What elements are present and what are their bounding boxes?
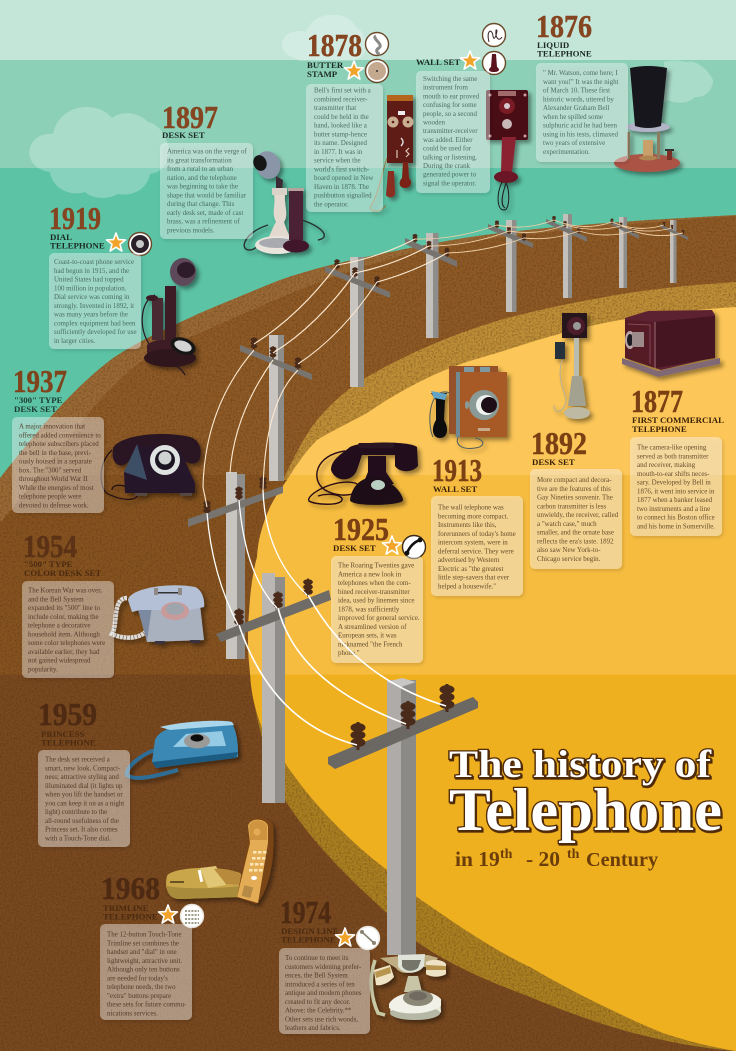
subtitle: DESIGN LINE [281, 926, 338, 936]
year: 1968 [101, 870, 160, 906]
icon: handset [402, 536, 426, 558]
panel text: its great transformation [167, 156, 232, 164]
panel text: created to fit any decor. [285, 998, 351, 1006]
year: 1959 [38, 696, 97, 732]
panel text: Electric as "the greatest [438, 565, 504, 573]
subtitle: century: Century [586, 849, 658, 871]
panel text: its name. Designed [314, 139, 368, 147]
panel text: two years of extensive [543, 139, 605, 147]
panel text: telephone subscribers placed [19, 440, 99, 448]
subtitle: century: th [567, 847, 580, 862]
panel text: sufficiently developed for use [54, 328, 137, 336]
panel text: and the Bell System [28, 595, 84, 603]
subtitle: DIAL [50, 232, 72, 242]
phone: 1974 design line telephone [371, 954, 446, 1020]
panel text: sulphuric acid he had been [543, 122, 618, 130]
panel text: wooden [423, 118, 445, 126]
subtitle: DESK SET [162, 130, 205, 140]
panel text: in 1877. It was in [314, 148, 363, 156]
insulators on poles [203, 216, 684, 750]
subtitle: DESK SET [14, 404, 57, 414]
panel text: mouth to ear proved [423, 92, 480, 100]
panel text: brass, was a refinement of [167, 218, 240, 226]
panel text: telephones when the com- [338, 579, 411, 587]
panel text: bined receiver-transmitter [338, 588, 410, 596]
title line 2: Telephone [449, 777, 722, 843]
telephone wires [203, 220, 683, 745]
panel text: little step-savers that ever [438, 574, 510, 582]
panel: 1913 wall set [431, 452, 523, 596]
panel text: customers widening prefer- [285, 963, 362, 971]
panel box [416, 71, 490, 193]
panel text: could be held in the [314, 113, 369, 121]
panel text: improved for general service. [338, 614, 420, 622]
panel text: America was on the verge of [167, 148, 247, 156]
star [106, 233, 126, 251]
phone: 1892 desk set [554, 313, 590, 419]
panel: 1878 butter stamp [306, 27, 388, 212]
icon: stamp top [366, 60, 388, 82]
panel text: was many years before the [54, 310, 128, 318]
subtitle: TELEPHONE [41, 738, 96, 748]
panel text: expanded its "500" line to [28, 604, 100, 612]
panel text: when you lift the handset or [45, 790, 123, 798]
panel text: The 12-button Touch-Tone [107, 930, 181, 938]
panel text: you can keep it on as a night [45, 799, 124, 807]
panel text: when he spilled some [543, 113, 603, 121]
panel text: the operator. [314, 200, 349, 208]
panel text: intercom system, were in [438, 538, 508, 546]
panel text: experimentation. [543, 148, 590, 156]
panel text: world's first switch- [314, 165, 370, 173]
panel box [22, 581, 114, 678]
panel text: light) contribute to the [45, 808, 107, 816]
panel text: sary. Developed by Bell in [637, 478, 711, 486]
subtitle: "500" TYPE [24, 559, 72, 569]
panel text: United States had topped [54, 276, 124, 284]
icon: earpiece [366, 32, 388, 56]
star [460, 51, 480, 69]
panel: wall set [416, 24, 506, 193]
panel text: antique and modern phones [285, 989, 362, 997]
icon: receiver [482, 52, 506, 74]
panel text: complex equipment had been [54, 319, 136, 327]
panel text: tive are the features of this [537, 485, 611, 493]
panel text: Alexander Graham Bell [543, 104, 609, 112]
panel text: box. The "300" served [19, 466, 82, 474]
star [382, 536, 402, 554]
icon: handset [356, 926, 380, 950]
panel text: with a Touch-Tone dial. [45, 834, 111, 842]
panel text: telephone a decorative [28, 622, 90, 630]
panel text: talking or listening. [423, 153, 477, 161]
panel text: lightweight, attractive unit. [107, 957, 182, 965]
panel text: The Roaring Twenties gave [338, 562, 414, 570]
panel: 1937 300 type desk set [12, 363, 104, 513]
subtitle: WALL SET [433, 484, 477, 494]
panel box [530, 469, 622, 569]
panel text: nicknamed "the French [338, 640, 403, 648]
phone: wall set [486, 90, 528, 210]
panel text: confusing for some [423, 101, 477, 109]
panel text: "extra" buttons prepare [107, 992, 171, 1000]
panel text: pushbutton signalled [314, 192, 372, 200]
panel box [38, 750, 130, 847]
subtitle: century: in 19 [455, 847, 500, 871]
phone: 1968 trimline telephone [166, 818, 274, 904]
phone: 1925 french desk set [309, 442, 418, 505]
subtitle: TELEPHONE [537, 49, 592, 59]
panel: 1919 dial telephone [49, 200, 152, 349]
panel text: instrument from [423, 84, 468, 92]
panel text: previous models. [167, 226, 215, 234]
subtitle: WALL SET [416, 57, 460, 67]
panel text: advertised by Western [438, 556, 500, 564]
panel text: a "watch case," much [537, 520, 597, 528]
clouds [29, 15, 713, 198]
panel text: household item. Although [28, 630, 100, 638]
panel text: shape that would be familiar [167, 191, 247, 199]
year: 1954 [23, 528, 77, 564]
panel text: using in his tests, climaxed [543, 130, 618, 138]
panel text: helped a housewife." [438, 582, 496, 590]
year: 1877 [631, 383, 683, 419]
panel text: The Korean War was over, [28, 586, 102, 594]
phone: 1959 princess telephone [127, 721, 238, 778]
star [344, 61, 364, 79]
panel text: butter stamp-hence [314, 130, 367, 138]
panel text: ences, the Bell System [285, 972, 348, 980]
panel text: combined receiver- [314, 95, 368, 103]
panel text: in larger cities. [54, 337, 96, 345]
subtitle: TELEPHONE [281, 935, 336, 945]
panel text: Bell's first set with a [314, 86, 371, 94]
panel text: idea, used by linemen since [338, 596, 414, 604]
panel: 1877 first commercial telephone [630, 383, 724, 536]
panel text: during that change. This [167, 200, 235, 208]
panel: 1974 design line telephone [279, 894, 380, 1034]
panel text: to connect his Boston office [637, 514, 715, 522]
panel text: are needed for today's [107, 974, 168, 982]
panel text: throughout World War II [19, 475, 88, 483]
panel text: carbon transmitter is less [537, 502, 606, 510]
panel: 1954 500 type color desk set [22, 528, 114, 678]
panel text: served as both transmitter [637, 452, 709, 460]
sky background [0, 0, 736, 588]
panel text: also saw New York-to- [537, 546, 601, 554]
panel text: Trimline set combines the [107, 939, 179, 947]
hill: golden textured ring [252, 282, 736, 1051]
panel text: handset and "dial" in one [107, 948, 177, 956]
panel box [12, 417, 104, 513]
year: 1892 [531, 425, 587, 461]
panel text: devoted to defense work. [19, 501, 89, 509]
title line 1: The history of [449, 743, 712, 786]
panel text: some color telephones were [28, 639, 105, 647]
phone: 1919 dial telephone [142, 258, 198, 375]
panel text: Haven in 1878. The [314, 183, 369, 191]
panel text: service when the [314, 156, 361, 164]
panel text: While the energies of most [19, 484, 94, 492]
panel text: transmitter that [314, 104, 356, 112]
panel text: Instruments like this, [438, 521, 497, 529]
panel text: introduced a series of ten [285, 980, 355, 988]
panel text: European sets, it was [338, 632, 397, 640]
phone: 1877 first commercial telephone [622, 310, 720, 377]
panel text: transmitter-receiver [423, 127, 478, 135]
panel text: include color, making the [28, 613, 99, 621]
panel box [431, 496, 523, 596]
telephone poles receding into the distance [188, 214, 688, 955]
icon: rotary dial [128, 232, 152, 256]
panel box [100, 924, 192, 1020]
panel text: " Mr. Watson, come here; I [543, 69, 618, 77]
panel text: The wall telephone was [438, 504, 504, 512]
phone: 1954 500 type color desk set [112, 585, 204, 644]
panel text: all-round usefulness of the [45, 817, 119, 825]
panel text: Although only ten buttons [107, 966, 180, 974]
subtitle: TELEPHONE [103, 912, 158, 922]
panel box [630, 437, 722, 536]
panel text: could be used for [423, 145, 472, 153]
subtitle: DESK SET [333, 543, 376, 553]
subtitle: DESK SET [532, 457, 575, 467]
panel text: from a rural to an urban [167, 165, 234, 173]
year: 1925 [333, 511, 389, 547]
year: 1974 [280, 894, 331, 930]
subtitle: TRIMLINE [103, 903, 148, 913]
panel text: people, so a second [423, 110, 477, 118]
panel text: was added. Either [423, 136, 473, 144]
panel text: and his home in Somerville. [637, 522, 715, 530]
panel text: offered added convenience to [19, 431, 101, 439]
subtitle: STAMP [307, 69, 338, 79]
year: 1937 [13, 363, 67, 399]
panel text: want you!" It was the night [543, 78, 619, 86]
panel text: of March 10. These first [543, 86, 610, 94]
panel: 1968 trimline telephone [100, 870, 204, 1020]
panel text: smaller, and the ornate base [537, 528, 614, 536]
panel text: ously housed in a separate [19, 458, 92, 466]
panel text: America a new look in [338, 570, 402, 578]
subtitle: BUTTER [307, 60, 343, 70]
panel text: mouth-to-ear shifts neces- [637, 470, 710, 478]
panel text: board opened in New [314, 174, 374, 182]
year: 1876 [536, 8, 592, 44]
panel text: deferral service. They were [438, 547, 514, 555]
panel text: Coast-to-coast phone service [54, 258, 134, 266]
panel box [306, 84, 383, 212]
panel text: reflects the era's taste. 1892 [537, 537, 614, 545]
hill: brown ground [0, 215, 736, 1051]
panel text: The camera-like opening [637, 444, 706, 452]
panel text: During the crank [423, 162, 471, 170]
panel text: early desk set, made of cast [167, 209, 243, 217]
star [158, 905, 178, 923]
panel text: phone." [338, 649, 360, 657]
panel text: forerunners of today's home [438, 530, 516, 538]
panel text: telephone people were [19, 492, 81, 500]
panel text: the bell in the base, previ- [19, 449, 92, 457]
panel text: and receiver, making [637, 461, 696, 469]
panel text: had begun in 1915, and the [54, 267, 129, 275]
panel text: strongly. Invented in 1892, it [54, 302, 134, 310]
hill: yellow field [248, 307, 736, 1051]
title [449, 743, 722, 871]
year: 1919 [49, 200, 101, 236]
subtitle: LIQUID [537, 40, 569, 50]
panel text: telephone needs, the two [107, 983, 176, 991]
panel text: Princess set. It also comes [45, 826, 118, 834]
panel text: Other sets use rich woods, [285, 1015, 358, 1023]
panel text: 1877 when a banker leased [637, 496, 713, 504]
subtitle: century: th [500, 847, 513, 862]
panel text: historic words, uttered by [543, 95, 614, 103]
panel text: More compact and decora- [537, 476, 612, 484]
subtitle: TELEPHONE [50, 241, 105, 251]
panel text: these sets for future commu- [107, 1000, 187, 1008]
panel box [536, 63, 628, 162]
star [336, 928, 354, 946]
panel text: signal the operator. [423, 179, 476, 187]
panel text: Dial service was coming in [54, 293, 130, 301]
panel: 1892 desk set [530, 425, 622, 569]
panel text: ness; attractive styling and [45, 773, 119, 781]
panel text: 1878, was sufficiently [338, 605, 400, 613]
panel text: The desk set received a [45, 756, 110, 764]
panel box [160, 143, 253, 239]
panel: 1925 desk set [331, 511, 426, 663]
panel text: becoming more compact. [438, 512, 509, 520]
panel text: Above: the Celebrity.** [285, 1006, 352, 1014]
panel text: was beginning to take the [167, 182, 238, 190]
panel box [49, 253, 141, 349]
subtitle: FIRST COMMERCIAL [632, 415, 724, 425]
year: 1913 [432, 452, 482, 488]
panel: 1897 desk set [160, 99, 253, 239]
panel text: leathers and fabrics. [285, 1024, 341, 1032]
year: 1897 [162, 99, 218, 135]
panel text: Switching the same [423, 75, 477, 83]
panel text: generated power to [423, 171, 477, 179]
panel text: nation, and the telephone [167, 174, 237, 182]
panel text: 1876, it went into service in [637, 487, 715, 495]
panel text: smart, new look. Compact- [45, 764, 121, 772]
panel: 1876 liquid telephone [536, 8, 628, 162]
phone: 1897 desk set [244, 148, 324, 254]
panel text: nications services. [107, 1009, 158, 1017]
panel box [331, 556, 423, 663]
panel text: popularity. [28, 665, 58, 673]
phone: 1876 liquid telephone [614, 66, 680, 172]
phone: 1913 wall set [430, 366, 507, 448]
panel box [279, 948, 370, 1034]
subtitle: "300" TYPE [14, 395, 62, 405]
year: 1878 [307, 27, 362, 63]
phone: 1937 300 type desk set [101, 434, 201, 499]
panel text: two instruments and a line [637, 505, 710, 513]
panel text: hand, looked like a [314, 122, 367, 130]
panel text: available earlier, they had [28, 648, 100, 656]
panel text: not gained widespread [28, 656, 91, 664]
panel text: To continue to meet its [285, 954, 348, 962]
panel text: Chicago service begin. [537, 555, 601, 563]
subtitle: COLOR DESK SET [24, 568, 101, 578]
subtitle: PRINCESS [41, 729, 85, 739]
panel text: illuminated dial (it lights up [45, 782, 123, 790]
panel text: unwieldy, the receiver, called [537, 511, 619, 519]
panel: 1959 princess telephone [38, 696, 130, 847]
subtitle: TELEPHONE [632, 424, 687, 434]
subtitle: century: - 20 [526, 847, 560, 871]
panel text: A streamlined version of [338, 623, 407, 631]
panel text: 100 million in population. [54, 284, 127, 292]
phone: butter stamp wall unit [370, 95, 414, 211]
icon: keypad [180, 904, 204, 928]
panel text: Gay Nineties souvenir. The [537, 494, 613, 502]
icon: cord [482, 24, 506, 46]
panel text: A major innovation that [19, 422, 85, 430]
